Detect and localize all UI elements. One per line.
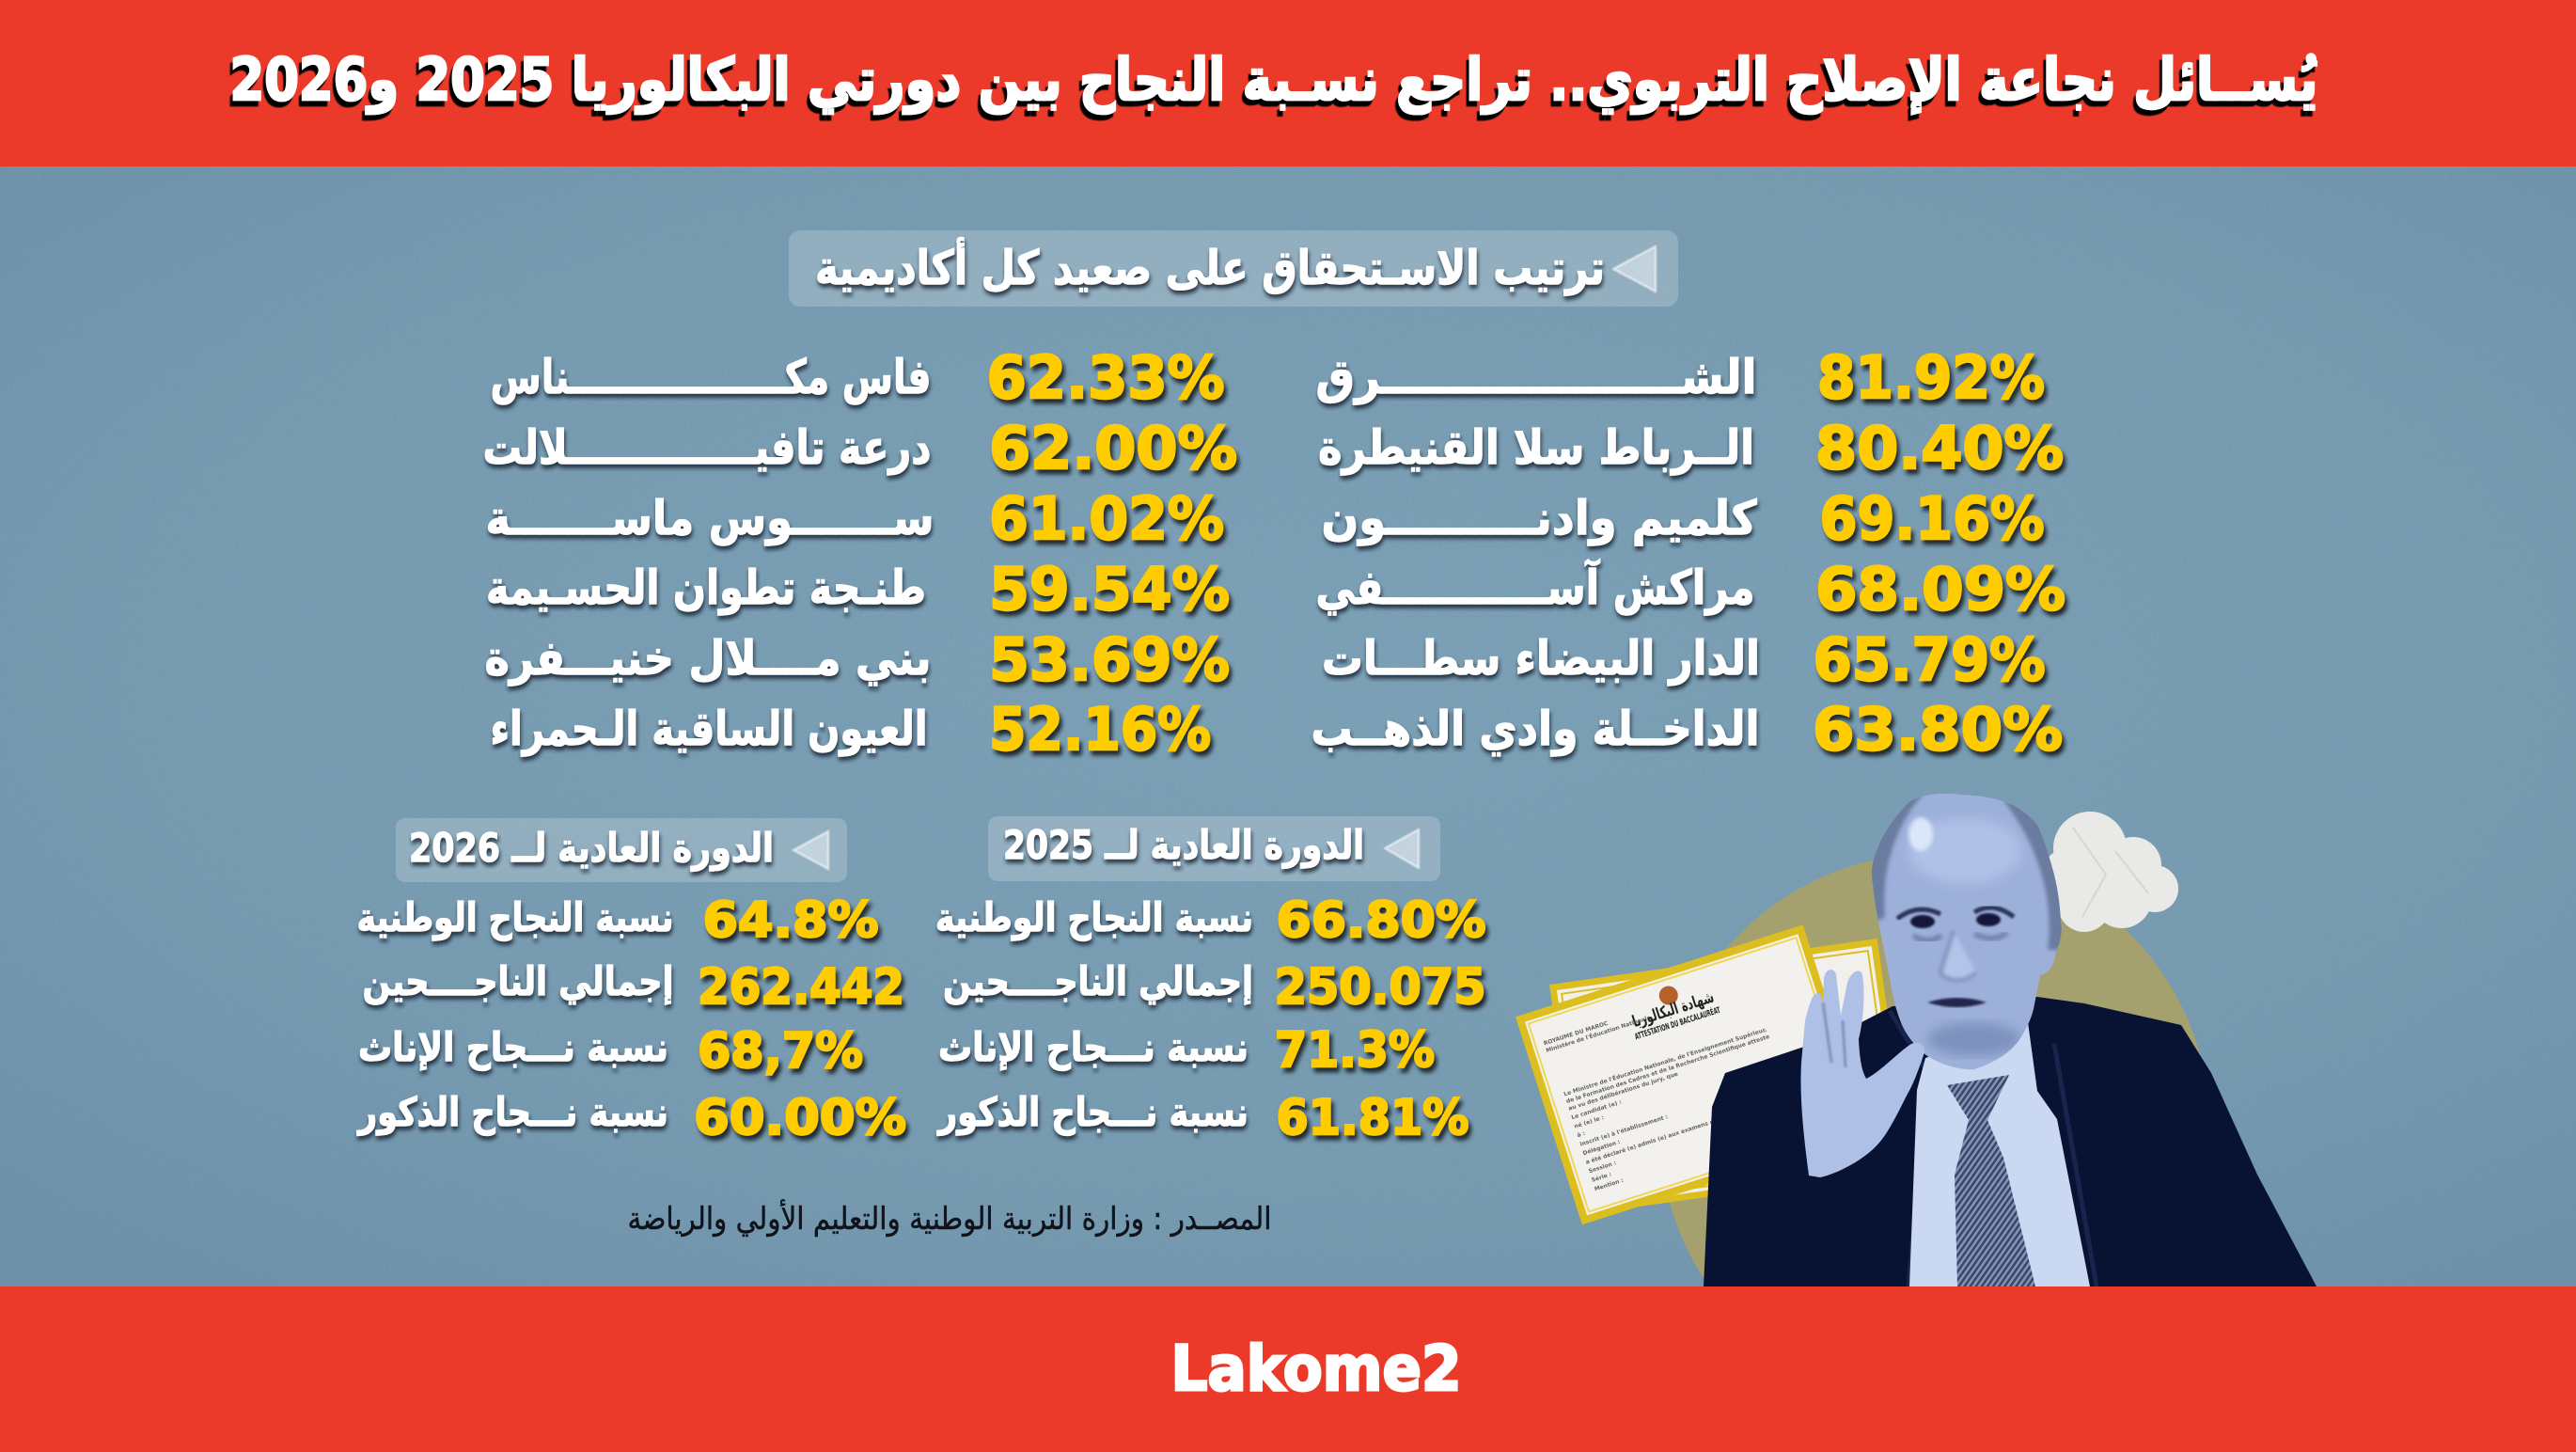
stat: national success rate 2025: نسبة النجاح الوطنية (935, 894, 1253, 941)
icon: pill arrow (1613, 246, 1656, 292)
front certificate: ATTESTATION DU BACCALAURÉAT (1633, 1004, 1722, 1042)
shirt (1909, 1022, 2090, 1286)
stat: female rate 2025: نسبة نـــجاح الإناث (938, 1024, 1249, 1070)
stat: female rate 2026 (358, 1023, 863, 1080)
row: Marrakech: 68.09% (1815, 555, 2066, 623)
heading pill: academy ranking (789, 230, 1678, 307)
illustration: collage with minister (1520, 785, 2317, 1286)
row: Marrakech: مراكش آســــــــــــفي (1316, 559, 1754, 616)
front certificate (1520, 929, 1864, 1220)
table: academies left column (483, 343, 1237, 764)
row: Oriental: الشــــــــــــــــــــرق (1316, 350, 1756, 405)
stat: national success rate 2026: نسبة النجاح الوطنية (357, 894, 673, 941)
stat: female rate 2025 (938, 1022, 1435, 1079)
front certificate: au vu des délibérations du jury, que (1568, 1071, 1679, 1113)
stat: male rate 2026 (356, 1089, 906, 1146)
row: Casablanca (1322, 625, 2046, 694)
minister figure (1704, 785, 2317, 1286)
front certificate: Série : (1591, 1171, 1612, 1184)
row: Laayoune: العيون الساقية الـحمراء (491, 702, 927, 757)
row: Fes: فاس مكـــــــــــــــــناس (491, 350, 931, 404)
row: Oriental: 81.92% (1817, 343, 2045, 412)
table: academies right column (1311, 343, 2066, 764)
head (1871, 794, 2062, 1070)
heading pill: academy ranking: ترتيب الاسـتحقاق على صعيد كل أكاديمية (815, 237, 1605, 296)
row: Guelmim: كلميم وادنــــــــــون (1322, 491, 1757, 546)
row: Marrakech (1316, 555, 2066, 623)
front certificate: Ministère de l'Éducation Nationale (1545, 1014, 1652, 1054)
stat: female rate 2025: 71.3% (1275, 1022, 1435, 1079)
row: Beni Mellal: بني مــــلال خنيـــفرة (485, 631, 931, 687)
source note: المصــدر : وزارة التربية الوطنية والتعليم الأولي والرياضة (628, 1199, 1271, 1237)
front certificate: ROYAUME DU MAROC (1543, 1020, 1610, 1047)
front certificate: Mention : (1594, 1177, 1625, 1192)
row: Beni Mellal: 53.69% (989, 625, 1230, 694)
heading pill: 2025 (988, 816, 1440, 881)
stat: female rate 2026: نسبة نـــجاح الإناث (358, 1024, 668, 1070)
row: Tanger: 59.54% (989, 555, 1230, 623)
panel: 2026 session (356, 818, 906, 1146)
heading pill: 2026: الدورة العادية لــ 2026 (409, 825, 774, 872)
row: Dakhla: 63.80% (1813, 695, 2063, 764)
row: Beni Mellal (485, 625, 1230, 694)
row: Souss: ســـــــوس ماســـــــة (485, 491, 935, 546)
row: Dakhla (1311, 695, 2063, 764)
footer brand: Lakome2 (1171, 1333, 1461, 1405)
stat: male rate 2025: 61.81% (1277, 1090, 1469, 1146)
panel: 2025 session (935, 816, 1485, 1146)
front certificate: شهادة البكالوريا (1630, 988, 1717, 1032)
row: Draa (483, 414, 1237, 482)
stat: female rate 2026: 68,7% (698, 1023, 863, 1080)
footer band (0, 1286, 2576, 1452)
stat: male rate 2026: نسبة نـــجاح الذكور (356, 1089, 668, 1136)
row: Oriental (1316, 343, 2045, 412)
front certificate: né (e) le : (1574, 1114, 1605, 1130)
row: Tanger: طنـجة تطوان الحسـيمة (486, 560, 926, 616)
row: Draa: درعة تافيــــــــــــــلالت (483, 420, 931, 475)
heading pill: 2025: الدورة العادية لــ 2025 (1003, 822, 1364, 869)
row: Souss: 61.02% (989, 484, 1224, 553)
heading pill: 2026 (396, 818, 847, 882)
row: Souss (485, 484, 1224, 553)
lapel shading (1890, 1011, 2097, 1286)
tie (1947, 1075, 2035, 1286)
stat: total passed 2026: إجمالي الناجــــحين (363, 958, 673, 1005)
front certificate: inscrit (e) à l'établissement : (1579, 1113, 1669, 1148)
stat: national success rate 2025: 66.80% (1277, 892, 1485, 949)
row: Rabat (1318, 414, 2064, 482)
back certificate (1553, 942, 1906, 1211)
stat: total passed 2026: 262.442 (698, 959, 904, 1016)
row: Laayoune: 52.16% (989, 695, 1211, 764)
front certificate: Le candidat (e) : (1571, 1098, 1623, 1121)
row: Laayoune (491, 695, 1211, 764)
stat: total passed 2025: 250.075 (1275, 959, 1485, 1016)
stat: national success rate 2026: 64.8% (703, 892, 878, 949)
row: Fes (491, 343, 1224, 412)
front certificate: Le Ministre de l'Éducation Nationale, de l'Enseignement Supérieur, (1563, 1026, 1767, 1097)
front certificate: Session : (1588, 1160, 1617, 1175)
row: Rabat: 80.40% (1815, 414, 2064, 482)
suit (1704, 997, 2317, 1286)
stat: total passed 2025: إجمالي الناجــــحين (943, 958, 1253, 1005)
stat: male rate 2025: نسبة نـــجاح الذكور (936, 1089, 1249, 1136)
row: Dakhla: الداخــلة وادي الذهــب (1311, 702, 1760, 757)
stat: total passed 2026 (363, 958, 904, 1016)
header band (0, 0, 2576, 166)
row: Tanger (486, 555, 1230, 623)
front certificate: de la Formation des Cadres et de la Recherche Scientifique atteste (1565, 1034, 1770, 1105)
title: يُســائل نجاعة الإصلاح التربوي.. تراجع نسـبة النجاح بين دورتي البكالوريا 2025 و2026 (229, 45, 2318, 114)
row: Draa: 62.00% (989, 414, 1237, 482)
stat: male rate 2026: 60.00% (694, 1090, 906, 1146)
front certificate: Délégation : (1582, 1139, 1621, 1157)
stat: national success rate 2025 (935, 892, 1485, 949)
olive circle (1659, 853, 2210, 1286)
stat: total passed 2025 (943, 958, 1485, 1016)
background: chalkboard (0, 166, 2576, 1286)
raised hand (1800, 970, 1924, 1177)
row: Fes: 62.33% (987, 343, 1224, 412)
row: Casablanca: 65.79% (1813, 625, 2046, 694)
front certificate: a été déclaré (e) admis (e) aux examens du baccalauréat (1585, 1104, 1760, 1166)
row: Casablanca: الدار البيضاء سطـــات (1322, 631, 1760, 686)
stat: male rate 2025 (936, 1089, 1469, 1146)
row: Rabat: الــرباط سلا القنيطرة (1318, 420, 1754, 476)
front certificate: à : (1577, 1130, 1586, 1139)
stat: national success rate 2026 (357, 892, 878, 949)
icon: paper cloud (2042, 812, 2178, 932)
row: Guelmim (1322, 484, 2044, 553)
row: Guelmim: 69.16% (1820, 484, 2044, 553)
